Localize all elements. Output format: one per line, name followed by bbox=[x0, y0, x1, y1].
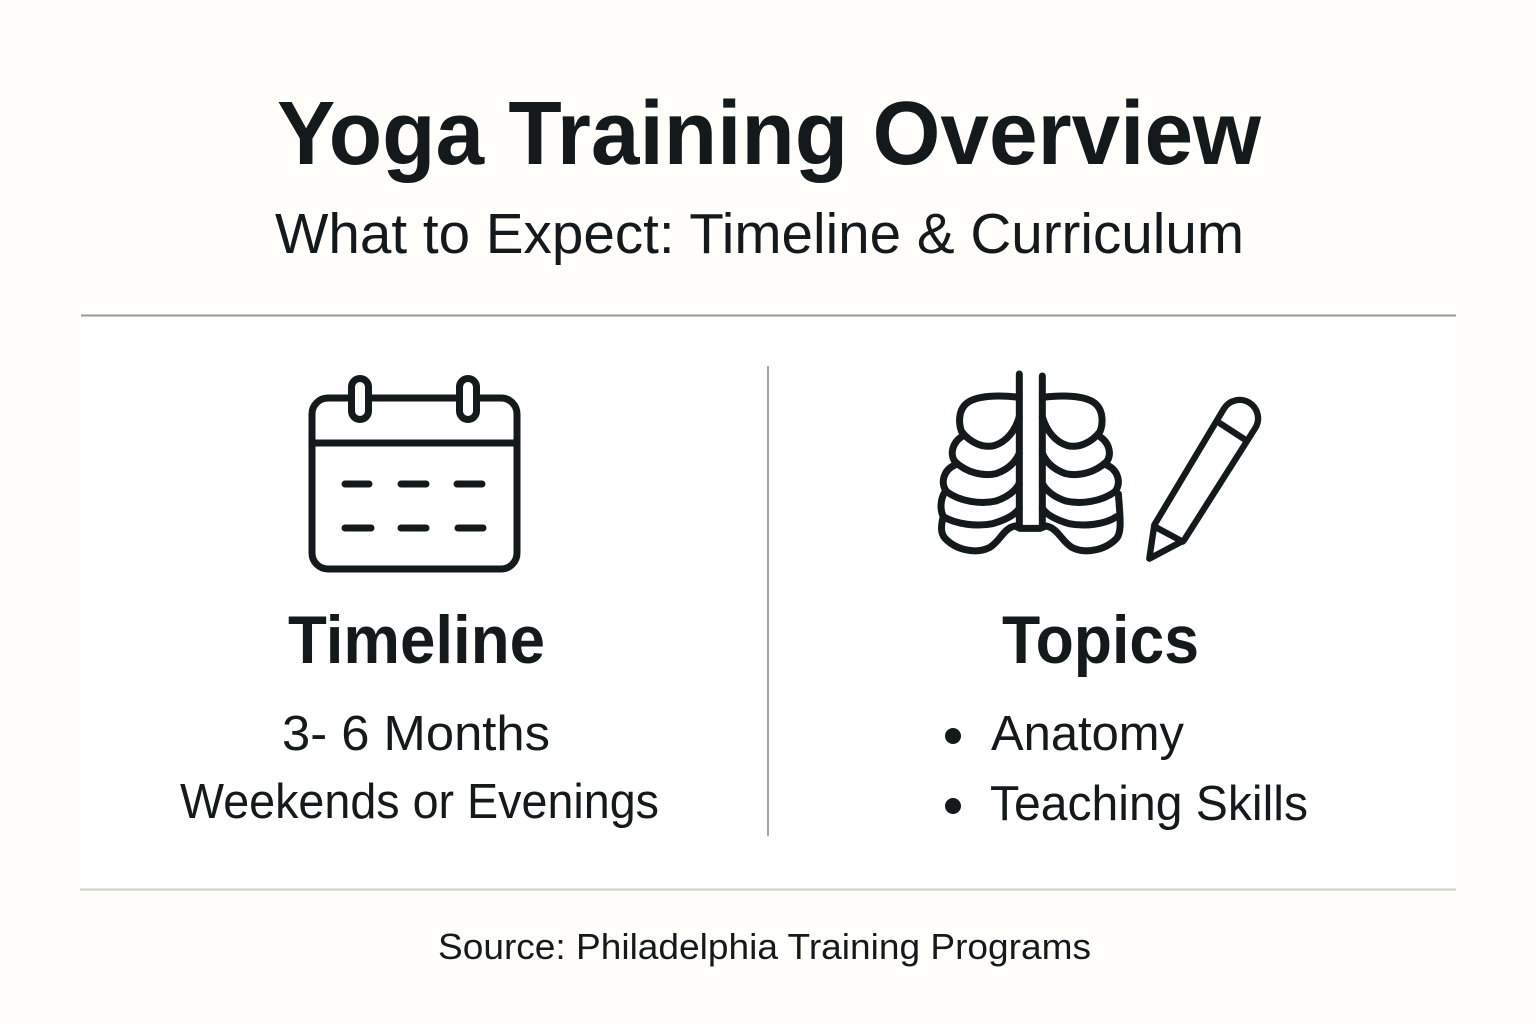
icon: pencil bbox=[1149, 400, 1258, 559]
heading: topics: Topics bbox=[1002, 602, 1199, 678]
title: Yoga Training Overview bbox=[277, 84, 1262, 184]
panel: timeline bbox=[180, 378, 659, 829]
text: schedule: Weekends or Evenings bbox=[180, 775, 659, 829]
icon: calendar bbox=[312, 378, 517, 569]
bullet: anatomy: Anatomy bbox=[991, 707, 1184, 761]
subtitle: What to Expect: Timeline & Curriculum bbox=[275, 202, 1244, 266]
panel: topics bbox=[941, 374, 1308, 831]
icon: rib cage bbox=[941, 374, 1120, 551]
text: duration: 3- 6 Months bbox=[282, 707, 550, 761]
heading: timeline: Timeline bbox=[288, 602, 545, 678]
bullet: teaching skills: Teaching Skills bbox=[990, 777, 1308, 831]
source note: Source: Philadelphia Training Programs bbox=[438, 926, 1091, 967]
